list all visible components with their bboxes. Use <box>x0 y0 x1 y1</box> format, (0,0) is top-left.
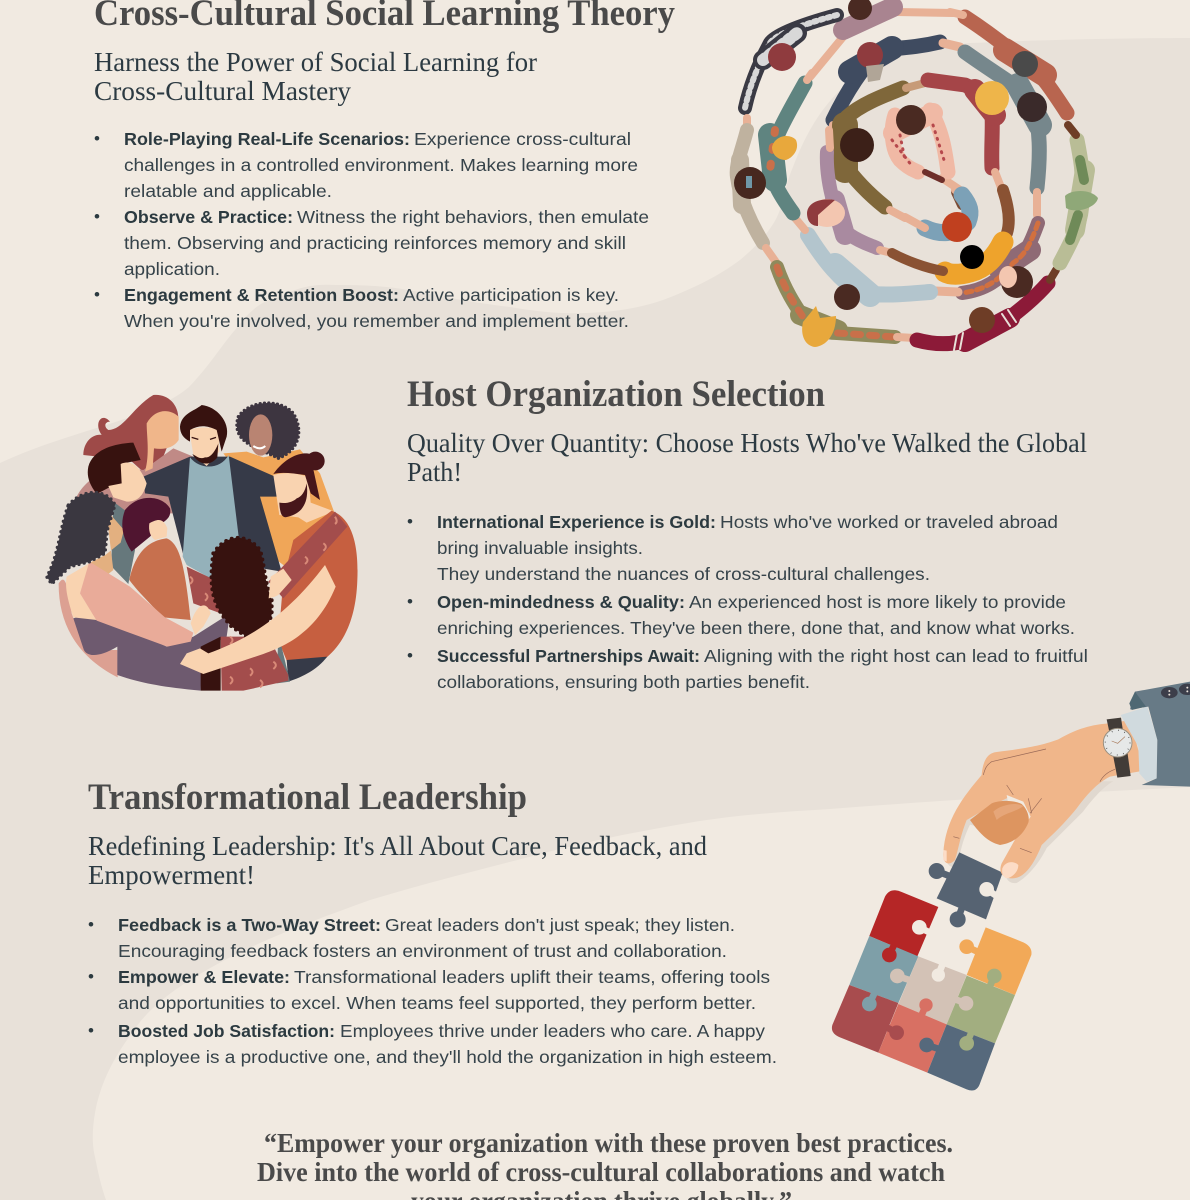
illustration: group of friends hugging <box>47 395 358 691</box>
bullet list: social learning: Observe & Practice: <box>124 207 293 227</box>
bullet list: social learning: Role-Playing Real-Life Scenarios: <box>124 129 410 149</box>
bullet list: social learning: Experience cross-cultural <box>414 129 631 149</box>
bullet list: leadership: • <box>88 915 94 934</box>
bullet list: leadership: Empower & Elevate: <box>118 967 290 987</box>
bullet list: social learning: • <box>94 129 100 148</box>
bullet list: leadership: Encouraging feedback fosters an environment of trust and collaboration. <box>118 941 727 961</box>
closing quote: “Empower your organization with these proven best practices. <box>264 1128 953 1158</box>
bullet list: social learning: • <box>94 207 100 226</box>
bullet list: leadership: and opportunities to excel. When teams feel supported, they perform better. <box>118 993 756 1013</box>
bullet list: leadership: • <box>88 967 94 986</box>
illustration: hand placing puzzle piece <box>832 682 1190 1090</box>
loose puzzle piece <box>929 852 1003 927</box>
subheading: Harness the Power: Cross-Cultural Mastery <box>94 76 351 106</box>
bullet list: leadership: Great leaders don't just speak; they listen. <box>385 915 735 935</box>
bullet list: host selection: enriching experiences. They've been there, done that, and know what works. <box>437 618 1075 638</box>
bullet list: host selection: bring invaluable insights. <box>437 538 643 558</box>
bullet list: host selection: International Experience is Gold: <box>437 512 716 532</box>
subheading: Harness the Power <box>94 47 537 106</box>
closing quote: Dive into the world of cross-cultural collaborations and watch <box>257 1157 945 1187</box>
subheading: Redefining Leadership: Redefining Leadership: It's All About Care, Feedback, and <box>88 831 707 861</box>
bullet list: host selection: collaborations, ensuring both parties benefit. <box>437 672 810 692</box>
subheading: Quality Over Quantity: Path! <box>407 457 462 487</box>
bullet list: leadership: • <box>88 1021 94 1040</box>
bullet list: social learning <box>94 129 649 331</box>
subheading: Harness the Power: Harness the Power of Social Learning for <box>94 47 537 77</box>
bullet list: leadership: Feedback is a Two-Way Street: <box>118 915 381 935</box>
bullet list: host selection: • <box>407 512 413 531</box>
illustration: spiral of people holding hands <box>737 7 1085 350</box>
hand <box>943 720 1144 878</box>
subheading: Redefining Leadership <box>88 831 707 890</box>
bullet list: social learning: Engagement & Retention Boost: <box>124 285 399 305</box>
bullet list: host selection: They understand the nuances of cross-cultural challenges. <box>437 564 930 584</box>
bullet list: leadership: Employees thrive under leaders who care. A happy <box>340 1021 765 1041</box>
subheading: Redefining Leadership: Empowerment! <box>88 860 255 890</box>
bullet list: social learning: • <box>94 285 100 304</box>
heading: Host Organization Selection: Host Organization Selection <box>407 374 825 415</box>
bullet list: leadership: Transformational leaders uplift their teams, offering tools <box>294 967 770 987</box>
bullet list: social learning: relatable and applicable. <box>124 181 332 201</box>
bullet list: social learning: challenges in a controlled environment. Makes learning more <box>124 155 638 175</box>
bullet list: leadership: Boosted Job Satisfaction: <box>118 1021 335 1041</box>
bullet list: host selection: Open-mindedness & Quality: <box>437 592 685 612</box>
subheading: Quality Over Quantity <box>407 428 1087 487</box>
bullet list: host selection: Aligning with the right host can lead to fruitful <box>704 646 1088 666</box>
heading: Transformational Leadership: Transformational Leadership <box>88 777 527 818</box>
bullet list: host selection: • <box>407 646 413 665</box>
bullet list: host selection: Hosts who've worked or traveled abroad <box>720 512 1058 532</box>
puzzle board <box>832 890 1031 1090</box>
bullet list: social learning: application. <box>124 259 220 279</box>
bullet list: host selection: Successful Partnerships Await: <box>437 646 700 666</box>
bullet list: social learning: When you're involved, you remember and implement better. <box>124 311 629 331</box>
bullet list: leadership <box>88 915 777 1067</box>
bullet list: social learning: Active participation is key. <box>403 285 619 305</box>
subheading: Quality Over Quantity: Quality Over Quantity: Choose Hosts Who've Walked the Global <box>407 428 1087 458</box>
closing quote <box>257 1128 953 1200</box>
bullet list: host selection: • <box>407 592 413 611</box>
bullet list: host selection: An experienced host is more likely to provide <box>689 592 1066 612</box>
shirt cuff and sleeve <box>1121 682 1190 787</box>
wristwatch <box>1103 718 1132 778</box>
bullet list: host selection <box>407 512 1088 692</box>
bullet list: social learning: them. Observing and practicing reinforces memory and skill <box>124 233 626 253</box>
bullet list: social learning: Witness the right behaviors, then emulate <box>297 207 649 227</box>
bullet list: leadership: employee is a productive one, and they'll hold the organization in high esteem. <box>118 1047 777 1067</box>
hand shadow <box>947 780 1113 883</box>
